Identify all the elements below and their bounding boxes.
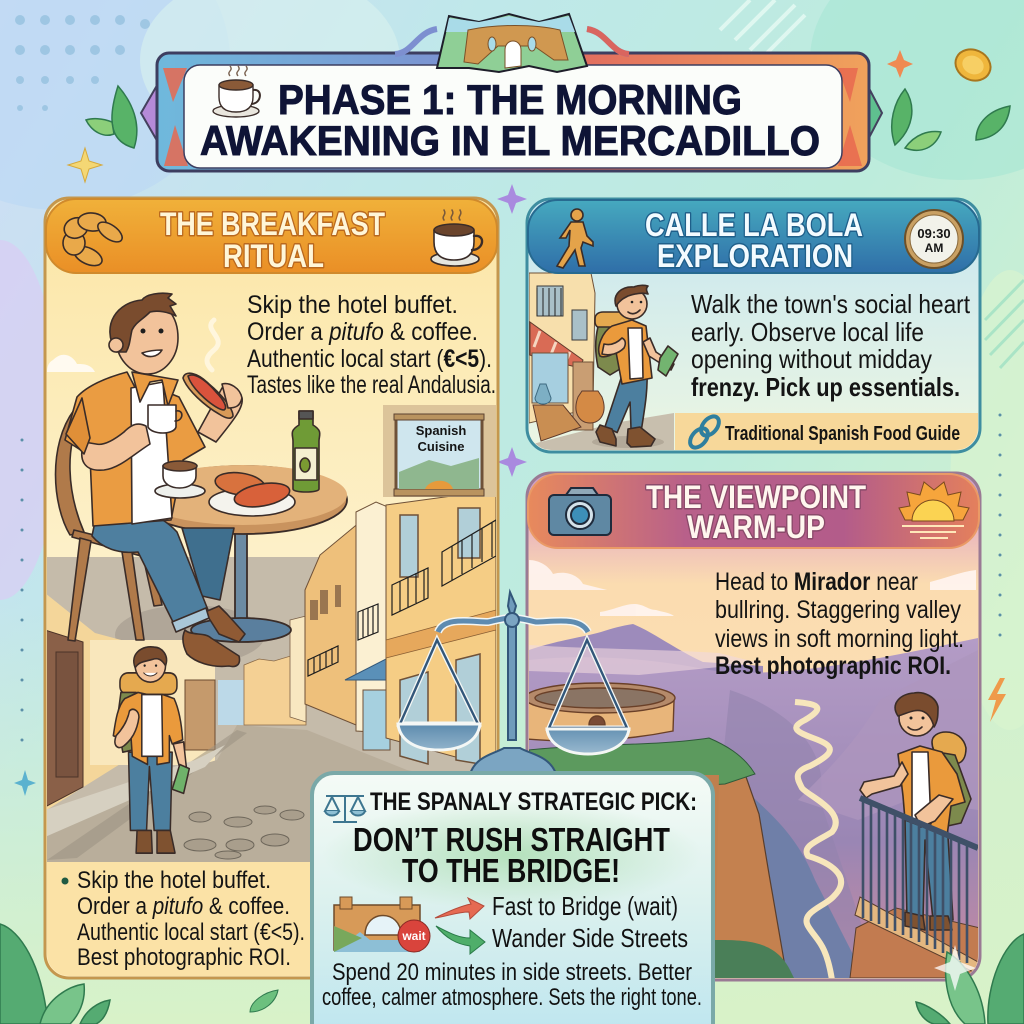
callout headline: DON’T RUSH STRAIGHT (353, 821, 670, 858)
seated man (65, 293, 245, 667)
callout body text (322, 959, 702, 1011)
viewpoint text block (715, 568, 964, 680)
callout: the spanaly strategic pick (312, 773, 713, 1024)
calle header (528, 200, 979, 274)
calle heading text: CALLE LA BOLA (645, 207, 863, 243)
title text (200, 76, 820, 164)
icon: coffee cup with steam (431, 210, 482, 266)
small leaf (250, 990, 278, 1012)
icon: coffee cup (213, 66, 260, 117)
panel: the viewpoint warm-up (525, 473, 980, 985)
title text: PHASE 1: THE MORNING (278, 76, 742, 123)
street hiker (113, 647, 189, 853)
spanish cuisine sign: Spanish (416, 423, 466, 438)
viewpoint heading text: THE VIEWPOINT (646, 479, 866, 515)
callout body text: coffee, calmer atmosphere. Sets the right tone. (322, 984, 702, 1011)
icon: clock (905, 210, 963, 268)
breakfast text block: Authentic local start (€<5). (247, 345, 492, 373)
balance scale (398, 592, 629, 774)
plant: bottom right (916, 934, 1024, 1024)
breakfast text block: Order a pitufo & coffee. (247, 318, 478, 346)
icon: bridge with wait badge: wait (401, 929, 426, 943)
bottom note box: Best photographic ROI. (77, 944, 291, 971)
link text: Traditional Spanish Food Guide (725, 423, 960, 445)
banner frame (141, 29, 882, 171)
olive oil bottle (292, 411, 320, 492)
callout body text: Spend 20 minutes in side streets. Better (332, 959, 692, 986)
calle text block: early. Observe local life (691, 317, 924, 347)
calle text block: frenzy. Pick up essentials. (691, 372, 960, 402)
viewpoint header (528, 474, 979, 548)
callout headline: TO THE BRIDGE! (402, 852, 620, 889)
icon: chain link (687, 413, 722, 451)
calle heading text: EXPLORATION (657, 238, 853, 274)
cloud (47, 355, 95, 372)
viewpoint heading text (646, 479, 866, 545)
breakfast heading text: THE BREAKFAST (160, 206, 385, 242)
breakfast text block (247, 291, 496, 399)
bullring (525, 683, 675, 741)
calle text block (691, 289, 971, 402)
shop building (529, 273, 674, 453)
route labels (492, 891, 688, 953)
callout kicker: THE SPANALY STRATEGIC PICK: (370, 788, 697, 816)
calle text block: opening without midday (691, 344, 932, 374)
icon: camera (549, 488, 611, 535)
spanish cuisine sign: Cuisine (418, 439, 464, 454)
route labels: Wander Side Streets (492, 923, 688, 953)
white sparkle (934, 945, 976, 991)
arrow: wander side streets (436, 926, 485, 954)
spanish cuisine sign (383, 405, 497, 497)
icon: croissant (61, 212, 125, 270)
title text: AWAKENING IN EL MERCADILLO (200, 117, 820, 164)
bottom note box: Authentic local start (€<5). (77, 919, 305, 946)
railing (860, 798, 978, 963)
icon: bridge with wait badge (334, 897, 430, 952)
decorative leaves right (892, 89, 1010, 150)
plant: bottom left (0, 924, 110, 1024)
bottom note box (45, 862, 315, 978)
bottom note box: Skip the hotel buffet. (77, 867, 271, 894)
clouds (529, 560, 976, 616)
footer band (675, 413, 980, 453)
steam swirl (207, 320, 218, 370)
panel: the breakfast ritual (45, 198, 498, 978)
cup on table (155, 461, 205, 498)
icon: mini scale (325, 795, 365, 822)
route labels: Fast to Bridge (wait) (492, 891, 678, 921)
breakfast text block: Skip the hotel buffet. (247, 291, 458, 319)
breakfast text block: Tastes like the real Andalusia. (247, 371, 496, 399)
street scene (45, 490, 497, 880)
breakfast heading text: RITUAL (223, 238, 324, 274)
hiker at rail (860, 693, 971, 930)
table (166, 465, 348, 643)
toast plate (209, 470, 295, 516)
title banner (141, 14, 882, 171)
walking hiker (592, 285, 678, 448)
chair (56, 410, 162, 641)
callout headline (353, 821, 670, 889)
breakfast header (46, 199, 497, 274)
landscape (529, 624, 980, 985)
viewpoint text block: bullring. Staggering valley (715, 596, 961, 624)
viewpoint heading text: WARM-UP (687, 509, 825, 545)
arrow: fast to bridge (435, 898, 484, 919)
icon: walker (557, 209, 593, 268)
calle text block: Walk the town's social heart (691, 289, 971, 319)
icon: clock: AM (925, 241, 943, 255)
icon: gold coin (950, 44, 996, 86)
viewpoint text block: views in soft morning light. (715, 625, 964, 653)
panel: calle la bola exploration (527, 199, 980, 453)
icon: clock: 09:30 (917, 226, 951, 241)
decorative leaves left (86, 86, 137, 148)
bottom note box: Order a pitufo & coffee. (77, 893, 290, 920)
icon: folded map (437, 14, 587, 72)
sparkles (14, 50, 1006, 796)
breakfast heading text (160, 206, 385, 274)
icon: sun (899, 482, 969, 538)
viewpoint text block: Best photographic ROI. (715, 652, 951, 680)
calle heading text (645, 207, 863, 274)
viewpoint text block: Head to Mirador near (715, 568, 918, 596)
